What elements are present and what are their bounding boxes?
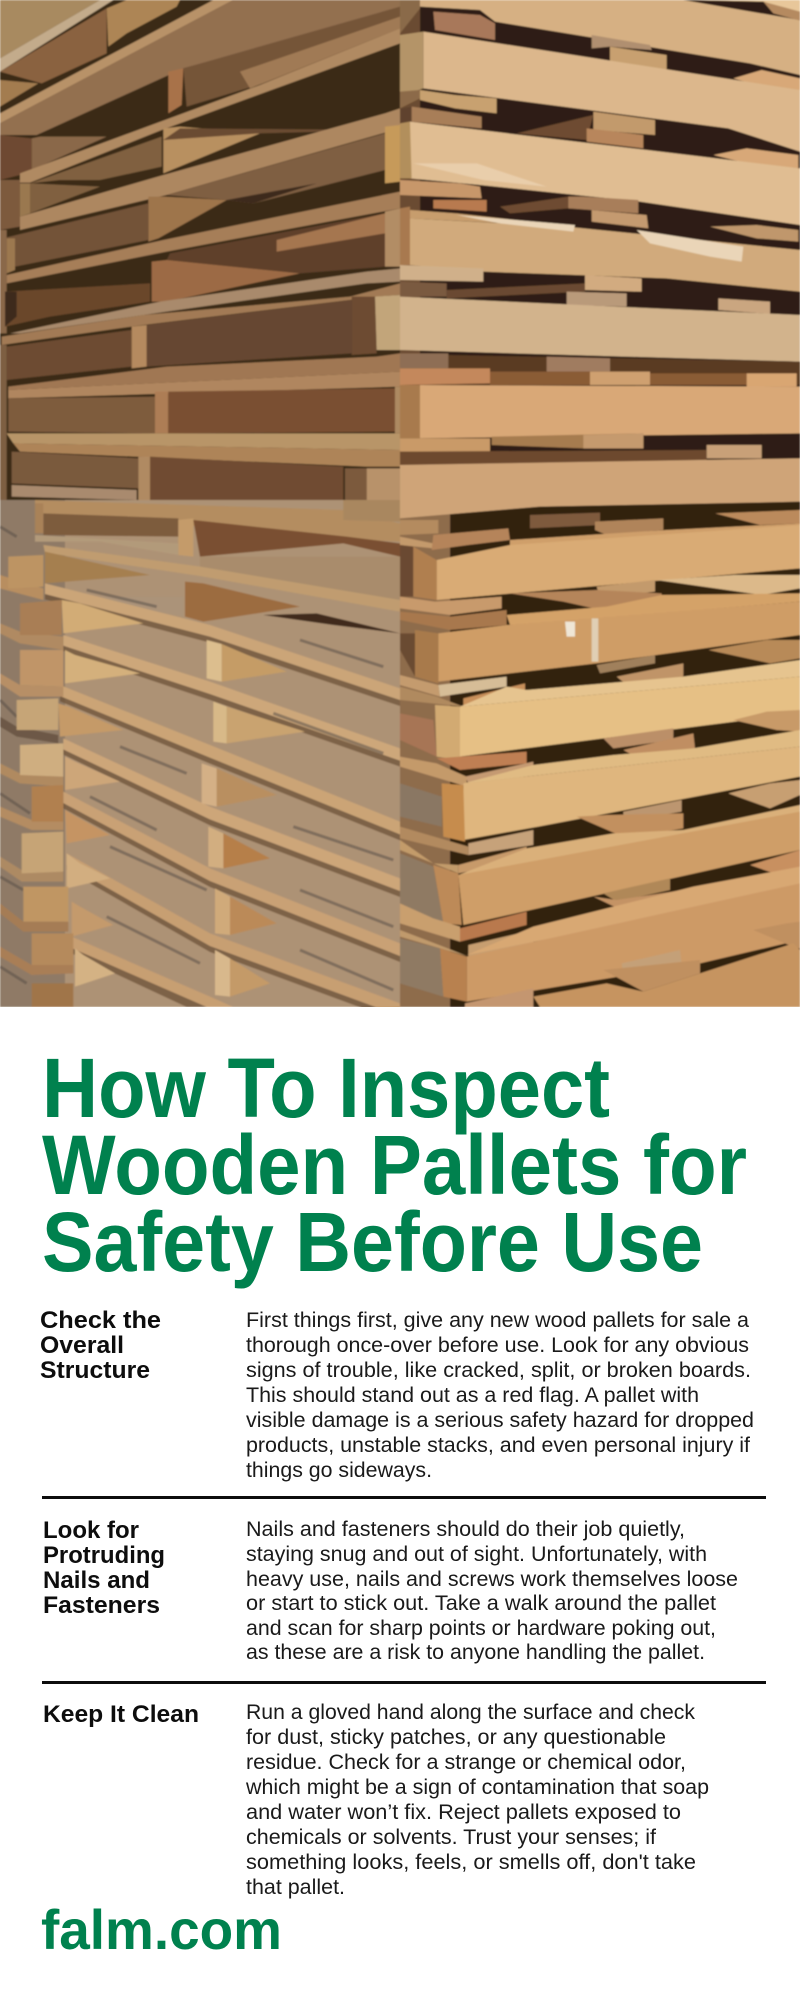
website: falm.com: falm.com: [41, 1898, 282, 1961]
body text: section 1: First things first, give any new wood pallets for sale a: [246, 1308, 749, 1332]
body text: section 3: [245, 1700, 709, 1899]
heading: check the overall structure: Structure: [40, 1357, 150, 1384]
body text: section 2: heavy use, nails and screws work themselves loose: [246, 1567, 738, 1591]
body text: section 2: Nails and fasteners should do their job quietly,: [246, 1517, 685, 1541]
body text: section 3: that pallet.: [246, 1875, 345, 1899]
body text: section 3: chemicals or solvents. Trust your senses; if: [246, 1825, 656, 1849]
body text: section 3: residue. Check for a strange or chemical odor,: [246, 1750, 686, 1774]
body text: section 3: for dust, sticky patches, or any questionable: [246, 1725, 666, 1749]
heading: check the overall structure: Check the: [40, 1307, 161, 1334]
title: Wooden Pallets for: [42, 1118, 747, 1212]
body text: section 1: This should stand out as a red flag. A pallet with: [246, 1383, 699, 1407]
far left stack of blocks: [0, 555, 73, 1007]
heading: check the overall structure: [40, 1307, 161, 1384]
right stack lower: long front planks: [400, 500, 800, 1007]
title: How To Inspect: [42, 1041, 610, 1135]
dark grain streaks: [0, 527, 393, 990]
body text: section 3: which might be a sign of contamination that soap: [245, 1775, 709, 1799]
title: [42, 1041, 747, 1289]
heading: look for protruding nails and fasteners: Look for: [43, 1517, 139, 1544]
photo: stacked wooden pallets: [0, 0, 800, 1022]
left stack, lower rows: [0, 500, 400, 1022]
heading: check the overall structure: Overall: [40, 1332, 124, 1359]
body text: section 3: Run a gloved hand along the surface and check: [246, 1700, 695, 1724]
body text: section 3: something looks, feels, or smells off, don't take: [246, 1850, 696, 1874]
body text: section 1: things go sideways.: [246, 1458, 432, 1482]
left stack, upper rows: [0, 0, 400, 500]
body text: section 2: [246, 1517, 738, 1664]
body text: section 2: as these are a risk to anyone handling the pallet.: [246, 1640, 705, 1664]
body text: section 2: and scan for sharp points or hardware poking out,: [246, 1616, 716, 1640]
title: Safety Before Use: [42, 1195, 703, 1289]
body text: section 1: visible damage is a serious safety hazard for dropped: [246, 1408, 754, 1432]
heading: keep it clean: Keep It Clean: [43, 1701, 199, 1728]
body text: section 2: or start to stick out. Take a walk around the pallet: [246, 1591, 716, 1615]
body text: section 1: products, unstable stacks, and even personal injury if: [246, 1433, 750, 1457]
right stack upper: long front planks: [400, 0, 800, 500]
left inner blocks: [58, 600, 143, 987]
lower pallet edge strips: [45, 583, 400, 1016]
section 2: look for protruding nails and fasteners: [43, 1517, 738, 1664]
body text: section 1: signs of trouble, like cracked, split, or broken boards.: [246, 1358, 751, 1382]
middle blocks: [202, 640, 305, 997]
heading: look for protruding nails and fasteners: Fasteners: [43, 1592, 160, 1619]
shadows beneath the edge strips: [45, 594, 400, 1022]
heading: look for protruding nails and fasteners: [43, 1517, 165, 1619]
body text: section 1: [246, 1308, 754, 1482]
section 3: keep it clean: [43, 1700, 709, 1899]
section 1: check the overall structure: [40, 1307, 754, 1482]
body text: section 1: thorough once-over before use. Look for any obvious: [246, 1333, 749, 1357]
heading: look for protruding nails and fasteners: Nails and: [43, 1567, 150, 1594]
heading: look for protruding nails and fasteners: Protruding: [43, 1542, 165, 1569]
body text: section 3: and water won’t fix. Reject pallets exposed to: [246, 1800, 681, 1824]
body text: section 2: staying snug and out of sight. Unfortunately, with: [246, 1542, 707, 1566]
